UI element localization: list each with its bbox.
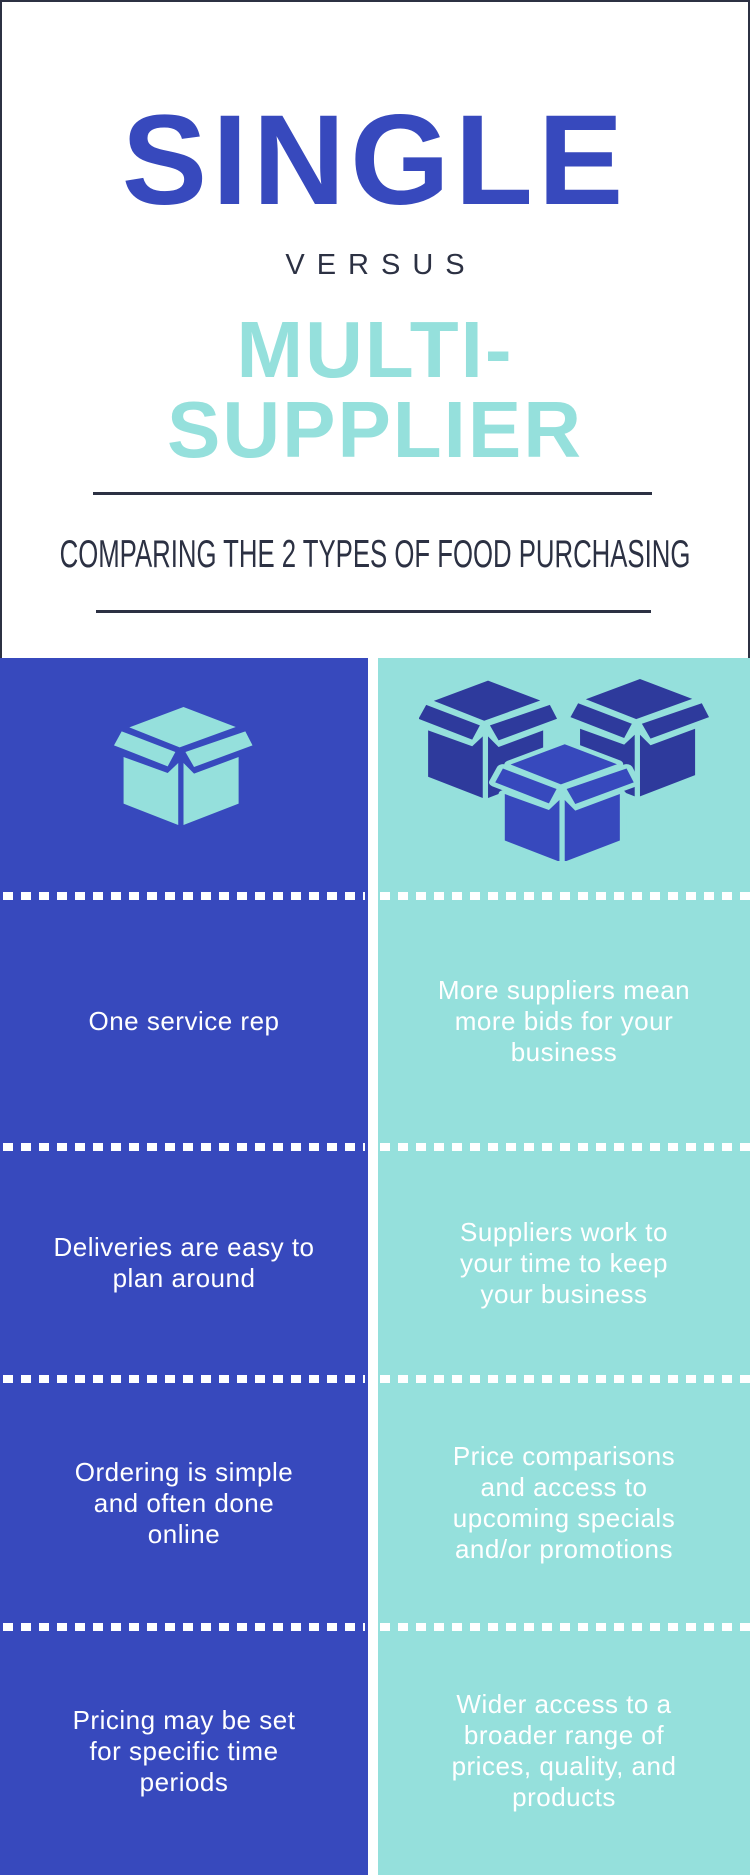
title: MULTI-SUPPLIER: SUPPLIER <box>167 385 583 474</box>
text: single row 3: Ordering is simple <box>75 1456 293 1486</box>
text: multi row 1 <box>438 975 690 1067</box>
subtitle: COMPARING THE 2 TYPES OF FOOD PURCHASING <box>60 533 690 576</box>
text: multi row 4: prices, quality, and <box>452 1751 676 1781</box>
text: multi row 3: upcoming specials <box>453 1503 675 1533</box>
text: single row 4: periods <box>140 1766 228 1796</box>
text: single row 2 <box>54 1232 314 1293</box>
text: single row 4: for specific time <box>89 1736 279 1766</box>
text: multi row 4: Wider access to a <box>456 1689 672 1719</box>
text: single row 3: online <box>148 1518 220 1548</box>
text: multi row 3: and/or promotions <box>455 1534 673 1564</box>
text: multi row 2 <box>460 1216 668 1308</box>
text: multi row 4 <box>452 1689 676 1812</box>
title: MULTI-SUPPLIER: MULTI- <box>236 305 514 394</box>
header panel <box>0 0 750 658</box>
text: multi row 3: and access to <box>481 1472 647 1502</box>
text: single row 4 <box>73 1704 295 1796</box>
panel: single supplier column <box>0 658 368 1875</box>
panel: multi supplier column <box>378 658 750 1875</box>
text: single row 1: One service rep <box>88 1006 280 1036</box>
text: single row 2: Deliveries are easy to <box>54 1232 314 1262</box>
text: single row 2: plan around <box>113 1263 255 1293</box>
title: MULTI-SUPPLIER <box>167 305 583 474</box>
text: single row 4: Pricing may be set <box>73 1704 295 1734</box>
text: multi row 2: your time to keep <box>460 1248 668 1278</box>
versus label: VERSUS <box>285 249 477 281</box>
text: single row 3: and often done <box>94 1488 274 1518</box>
icon: multiple boxes <box>419 679 709 861</box>
text: multi row 1: more bids for your <box>455 1006 673 1036</box>
text: multi row 1: business <box>511 1037 617 1067</box>
text: single row 3 <box>75 1456 293 1548</box>
text: multi row 3: Price comparisons <box>453 1441 675 1471</box>
text: multi row 2: Suppliers work to <box>460 1216 668 1246</box>
dividers <box>3 892 365 900</box>
text: multi row 4: products <box>512 1782 616 1812</box>
text: multi row 3 <box>453 1441 675 1564</box>
icon: single box <box>114 707 252 825</box>
text: multi row 4: broader range of <box>464 1720 664 1750</box>
text: multi row 2: your business <box>481 1278 647 1308</box>
text: multi row 1: More suppliers mean <box>438 975 690 1005</box>
title: SINGLE: SINGLE <box>122 89 628 232</box>
